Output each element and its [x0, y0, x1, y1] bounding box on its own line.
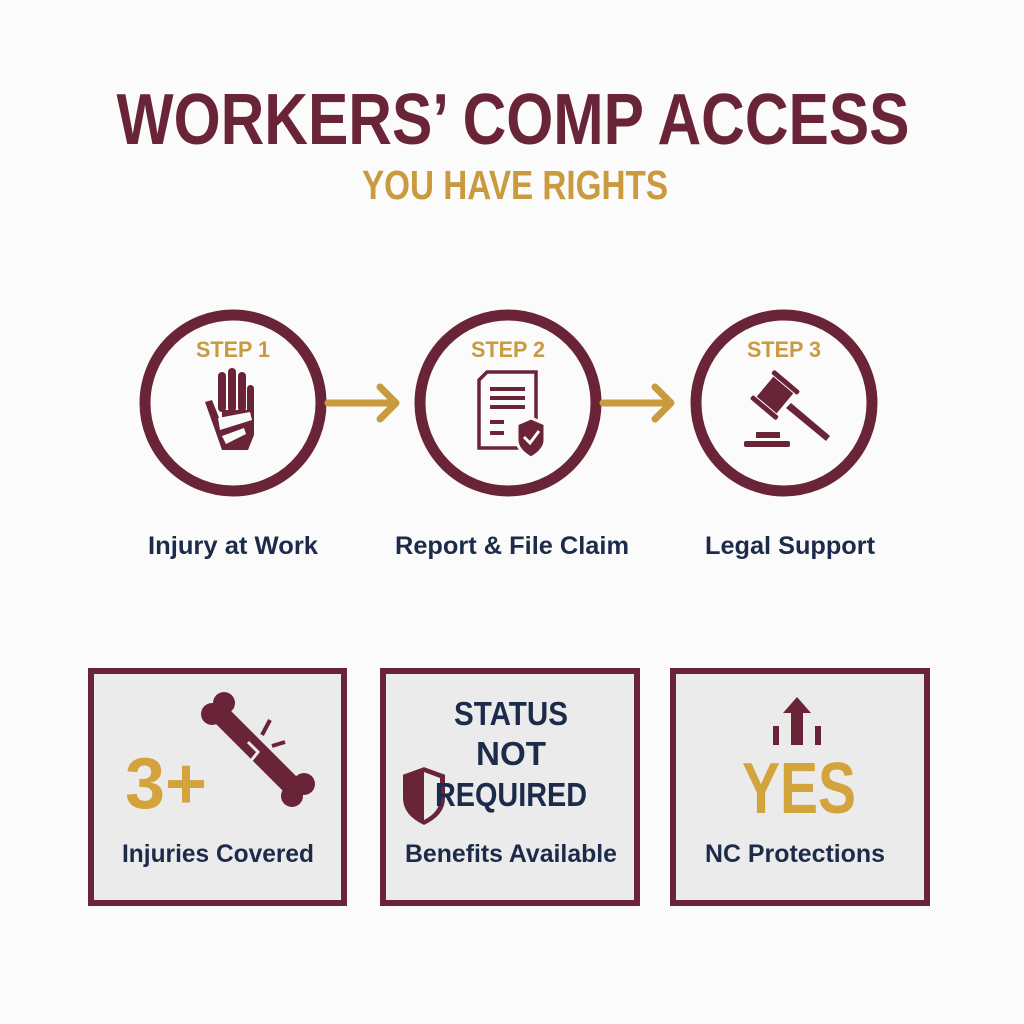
icon: document with shield: [479, 372, 545, 458]
icon: up arrow: [773, 697, 821, 745]
icon: shield: [402, 766, 446, 826]
panel: NC protections: [673, 671, 927, 903]
icon: broken bone: [201, 692, 315, 807]
panel: status not required: STATUS: [454, 695, 568, 732]
arrow 2: [603, 387, 671, 419]
step labels: Injury at Work: [148, 532, 318, 560]
step labels: Report & File Claim: [395, 532, 629, 560]
subtitle: YOU HAVE RIGHTS: [362, 162, 668, 208]
icon: bandaged hand: [205, 368, 254, 450]
arrow 1: [328, 387, 396, 419]
panel: status not required: Benefits Available: [405, 840, 617, 868]
panel: NC protections: YES: [742, 749, 856, 829]
step labels: Legal Support: [705, 532, 876, 560]
panel: status not required: REQUIRED: [435, 776, 587, 813]
panel: status not required: [383, 671, 637, 903]
step 2 circle: STEP 2: [471, 337, 545, 362]
panel: status not required: NOT: [476, 735, 546, 772]
step 3 circle: STEP 3: [747, 337, 821, 362]
step 1 circle: STEP 1: [196, 337, 270, 362]
panel: injuries covered: [91, 671, 344, 903]
panel: injuries covered: Injuries Covered: [122, 840, 314, 868]
step 2 circle: [420, 315, 596, 491]
step 1 circle: [145, 315, 321, 491]
panel: NC protections: NC Protections: [705, 840, 885, 868]
step labels: [148, 532, 876, 560]
step 3 circle: [696, 315, 872, 491]
icon: gavel: [744, 370, 830, 447]
panel: injuries covered: 3+: [125, 744, 207, 824]
